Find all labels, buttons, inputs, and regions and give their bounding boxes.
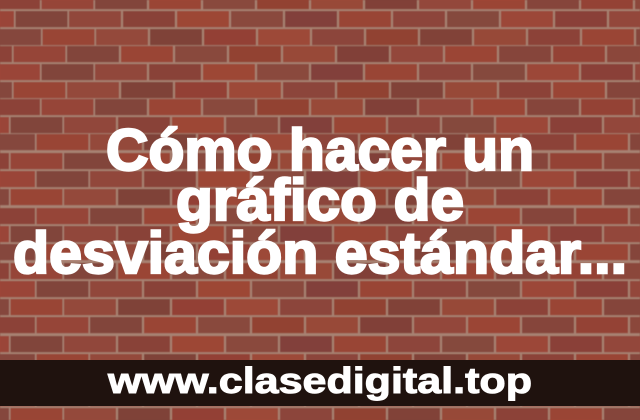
footer band	[0, 360, 640, 406]
title: gráfico de	[176, 168, 464, 233]
footer url: www.clasedigital.top	[107, 360, 532, 401]
title	[13, 118, 627, 286]
title: desviación estándar...	[13, 221, 627, 286]
title: Cómo hacer un	[106, 118, 534, 183]
